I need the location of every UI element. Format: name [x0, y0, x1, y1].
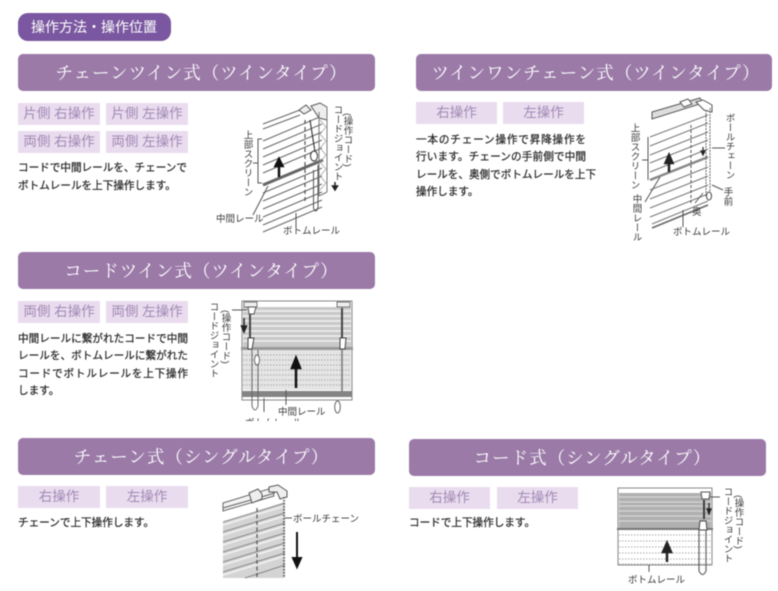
- label: ball chain: ボールチェーン: [724, 113, 735, 180]
- text: cord twin description: レールを、ボトムレールに繋がれた: [18, 350, 188, 362]
- label: cord joint: コードジョイント: [332, 105, 343, 181]
- title pill: [18, 13, 171, 41]
- text: cord twin description: します。: [18, 385, 59, 397]
- option: left: 左操作: [523, 105, 564, 120]
- label: cord joint: コードジョイント: [208, 302, 219, 378]
- arrow: down small: [242, 318, 246, 332]
- heading: cord single: コード式（シングルタイプ）: [474, 448, 711, 468]
- option: right: [409, 487, 490, 509]
- text: cord twin description: [18, 332, 188, 397]
- text: chain single description: チェーンで上下操作します。: [18, 517, 154, 529]
- text: twin one chain description: 一本のチェーン操作で昇降操作を: [416, 134, 586, 146]
- label: upper screen: 上部スクリーン: [628, 123, 640, 190]
- option: right: [18, 486, 100, 508]
- arrow: down small: [707, 503, 711, 514]
- label: middle rail: 中間レール: [630, 193, 642, 242]
- text: chain twin description: ボトムレールを上下操作します。: [18, 180, 176, 192]
- heading: cord single: [409, 439, 766, 476]
- option: right: 右操作: [429, 490, 470, 505]
- label: middle rail: 中間レール: [216, 213, 264, 225]
- option: right: 右操作: [436, 105, 477, 120]
- heading: chain single: [18, 438, 375, 475]
- option: left: 左操作: [517, 490, 558, 505]
- text: twin one chain description: [416, 132, 596, 198]
- label: bottom rail: ボトムレール: [283, 226, 341, 237]
- arrow: up: [276, 159, 282, 177]
- label: bottom rail: ボトムレール: [628, 575, 686, 586]
- label: ball chain: ボールチェーン: [293, 514, 359, 525]
- option: left: [106, 486, 188, 508]
- text: twin one chain description: 行います。チェーンの手前側で中間: [416, 151, 586, 163]
- heading: twin one chain: [416, 54, 772, 91]
- option: one side right: 片側 右操作: [23, 106, 95, 121]
- text: chain twin description: [18, 160, 187, 192]
- option: both sides right: [18, 301, 100, 323]
- option: both sides right: [18, 130, 100, 152]
- title pill: 操作方法・操作位置: [31, 19, 157, 35]
- text: twin one chain description: レールを、奥側でボトムレールを上下: [416, 168, 596, 180]
- heading: cord twin: [18, 252, 375, 289]
- label: back: 奥: [692, 206, 702, 218]
- label: cord joint: コードジョイント: [722, 487, 733, 563]
- text: chain twin description: コードで中間レールを、チェーンで: [18, 162, 187, 174]
- label: bottom rail: ボトムレール: [673, 227, 731, 238]
- text: cord twin description: 中間レールに繋がれたコードで中間: [18, 332, 188, 344]
- label: operating cord: (操作コード): [220, 310, 231, 364]
- heading: cord twin: コードツイン式（ツインタイプ）: [64, 261, 339, 281]
- option: right: [416, 102, 497, 124]
- label: front: 手前: [722, 186, 733, 207]
- option: one side left: [106, 103, 188, 125]
- label: operating cord: (操作コード): [732, 495, 744, 549]
- diagram: cord twin blind: [208, 300, 354, 422]
- heading: chain twin: [18, 54, 375, 91]
- heading: chain single: チェーン式（シングルタイプ）: [74, 447, 329, 467]
- option: both sides left: [106, 130, 188, 152]
- option: both sides left: [106, 301, 188, 323]
- option: left: [497, 487, 578, 509]
- option: both sides left: 両側 左操作: [111, 134, 183, 148]
- arrow: down small: [701, 147, 705, 155]
- text: cord twin description: コードでボトルレールを上下操作: [18, 368, 188, 380]
- option: both sides right: 両側 右操作: [23, 134, 95, 148]
- option: one side right: [18, 103, 100, 125]
- arrow: up: [663, 543, 671, 562]
- arrow: down: [293, 532, 301, 567]
- option: one side left: 片側 左操作: [111, 106, 183, 121]
- label: middle rail: 中間レール: [278, 406, 326, 418]
- arrow: up: [666, 155, 672, 172]
- label: operating cord: (操作コード): [342, 113, 353, 167]
- heading: chain twin: チェーンツイン式（ツインタイプ）: [56, 63, 347, 83]
- text: cord single description: コードで上下操作します。: [409, 517, 535, 529]
- option: both sides left: 両側 左操作: [111, 304, 183, 319]
- option: both sides right: 両側 右操作: [23, 304, 95, 319]
- label: upper screen: 上部スクリーン: [242, 130, 253, 196]
- option: left: [503, 102, 584, 124]
- option: right: 右操作: [39, 489, 79, 504]
- heading: twin one chain: ツインワンチェーン式（ツインタイプ）: [432, 63, 760, 83]
- option: left: 左操作: [127, 489, 167, 504]
- text: twin one chain description: 操作します。: [416, 186, 479, 198]
- arrow: up: [292, 358, 300, 388]
- arrow: down small: [332, 182, 338, 190]
